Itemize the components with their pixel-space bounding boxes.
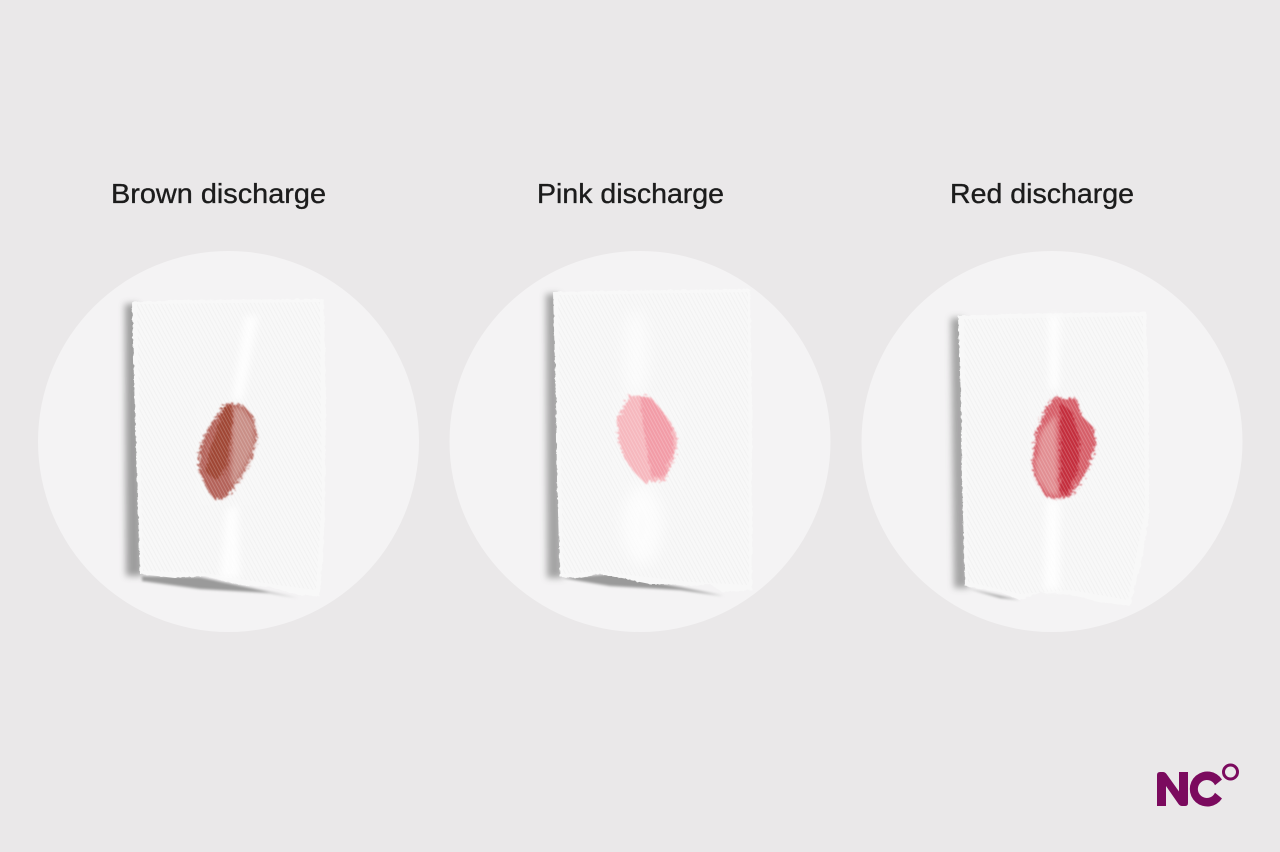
stain: [612, 392, 684, 490]
tissue shadow: [546, 294, 724, 596]
stain: [1028, 392, 1100, 502]
logo ring: [1224, 765, 1238, 779]
logo letter N: [1157, 772, 1188, 806]
backdrop circle: [450, 251, 830, 632]
tissue paper: [553, 289, 752, 592]
heading: brown discharge: Brown discharge: [111, 178, 326, 209]
panel: brown discharge tissue: [38, 251, 419, 632]
tissue paper: [132, 299, 326, 596]
tissue paper: [958, 312, 1149, 606]
panel: red discharge tissue: [862, 251, 1242, 632]
logo: [1157, 765, 1238, 807]
heading: red discharge: Red discharge: [950, 178, 1134, 209]
panel: pink discharge tissue: [450, 251, 830, 632]
tissue shadow: [125, 304, 298, 598]
backdrop circle: [862, 251, 1242, 632]
heading: pink discharge: Pink discharge: [537, 178, 724, 209]
stain: [196, 400, 260, 505]
tissue shadow: [951, 318, 1020, 600]
backdrop circle: [38, 251, 419, 632]
logo letter C: [1190, 772, 1222, 807]
